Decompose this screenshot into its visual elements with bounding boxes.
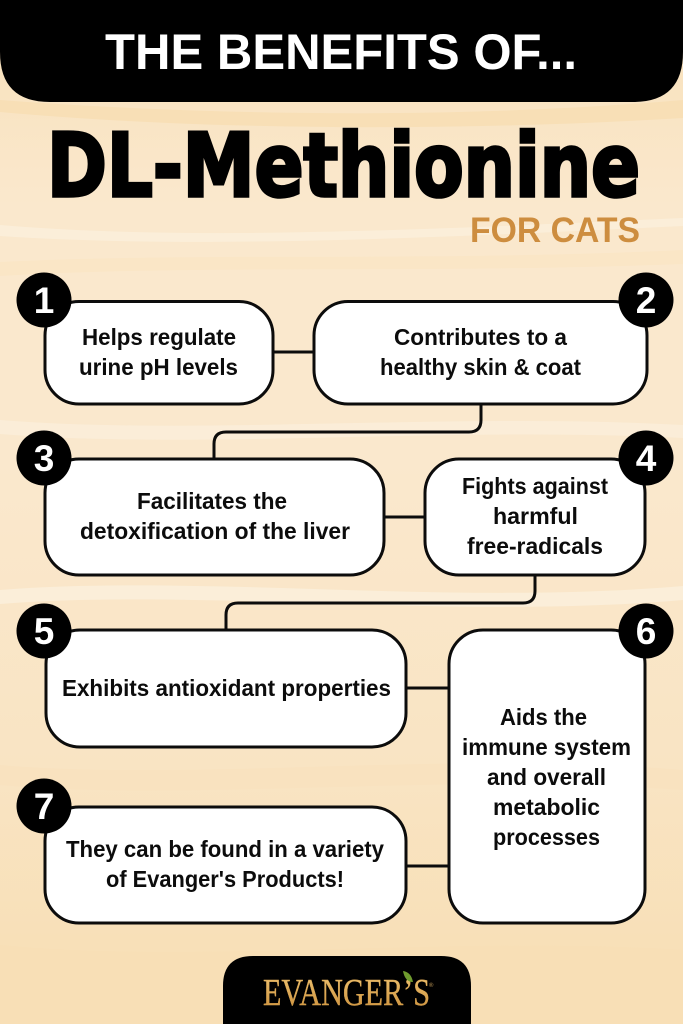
panel: benefit 5 [46, 630, 406, 747]
subtitle: FOR CATS [470, 211, 640, 250]
number badge 1 [16, 272, 72, 328]
number badge 7 [16, 778, 72, 834]
connectors [214, 352, 535, 866]
panel: benefit 5: Exhibits antioxidant properties [62, 675, 391, 701]
panel: benefit 4 [425, 459, 645, 575]
number badge 6: 6 [636, 611, 656, 652]
number badge 4: 4 [636, 438, 657, 479]
panel: benefit 3: Facilitates the [137, 488, 287, 514]
panel: benefit 2: healthy skin & coat [380, 354, 581, 380]
number badge 2 [618, 272, 674, 328]
panel: benefit 6: processes [493, 824, 600, 850]
panel: benefit 4: harmful [493, 503, 578, 529]
panel: benefit 6: metabolic [493, 794, 600, 820]
panel: benefit 6: immune system [462, 734, 631, 760]
panel: benefit 6: and overall [487, 764, 606, 790]
icon: leaf [403, 971, 413, 982]
number badge 6 [618, 604, 674, 658]
panel: benefit 7: of Evanger's Products! [106, 866, 344, 892]
heading: the benefits of: THE BENEFITS OF... [105, 24, 577, 80]
header banner [0, 0, 683, 102]
panel: benefit 1 [45, 302, 273, 404]
panel: benefit 1: Helps regulate [82, 324, 236, 350]
panel: benefit 2 [314, 302, 647, 404]
panel: benefit 7 [45, 807, 406, 923]
footer logo panel [223, 956, 471, 1024]
number badge 2: 2 [636, 280, 656, 321]
number badge 3: 3 [34, 438, 54, 479]
number badge 5: 5 [34, 611, 54, 652]
panel: benefit 7: They can be found in a variety [66, 836, 384, 862]
number badge 4 [618, 430, 674, 486]
panel: benefit 3: detoxification of the liver [80, 518, 350, 544]
number badge 1: 1 [34, 280, 54, 321]
panel: benefit 4: free-radicals [467, 533, 603, 559]
number badge 7: 7 [34, 786, 54, 827]
logo wordmark: EVANGER’S [263, 972, 430, 1014]
panel: benefit 4: Fights against [462, 473, 608, 499]
number badge 3 [16, 430, 72, 486]
panel: benefit 2: Contributes to a [394, 324, 567, 350]
panel: benefit 6 [449, 630, 645, 923]
panel: benefit 1: urine pH levels [79, 354, 238, 380]
panel: benefit 3 [45, 459, 384, 575]
number badge 5 [16, 604, 72, 658]
panel: benefit 6: Aids the [500, 704, 587, 730]
registered mark: ® [429, 982, 434, 989]
